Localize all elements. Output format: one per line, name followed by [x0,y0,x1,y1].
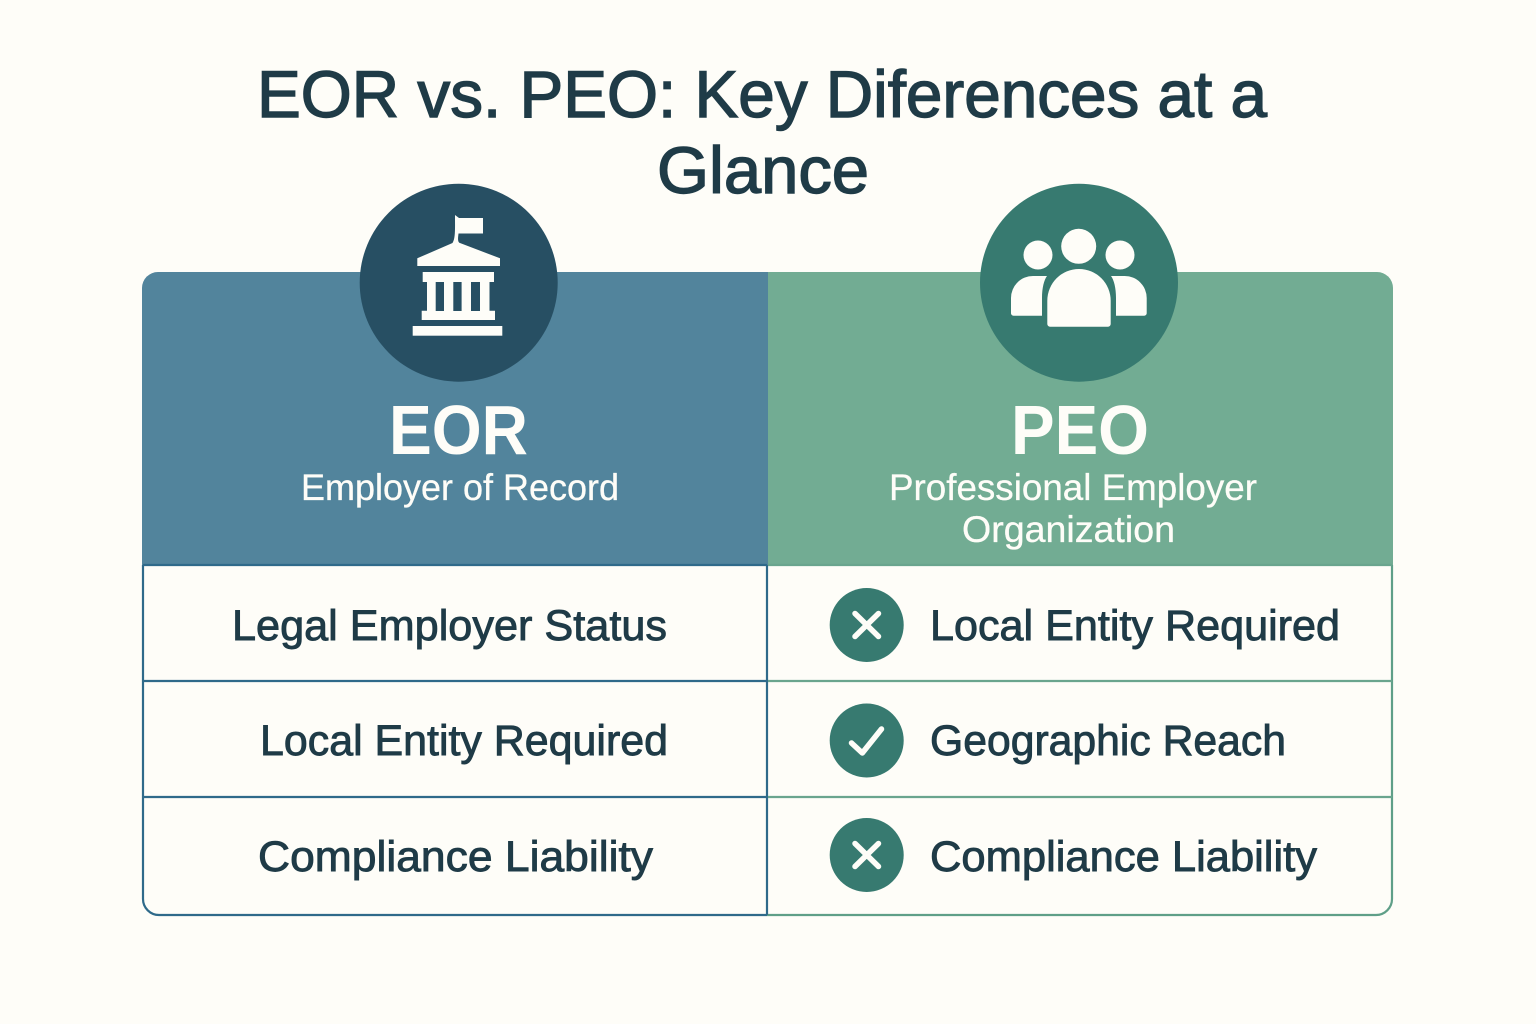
EOR header background [142,272,768,565]
PEO row: geographic reach, check: Geographic Reach [930,717,1286,765]
PEO row: local entity required, cross [830,588,1340,662]
panel: PEO column [768,184,1393,892]
panel: EOR column [142,184,768,881]
PEO row: compliance liability, cross: Compliance Liability [930,833,1318,881]
PEO row: compliance liability, cross [830,818,1318,892]
PEO subtitle [889,467,1257,550]
PEO icon: group of people [980,184,1178,382]
EOR row: compliance liability: Compliance Liability [258,833,654,881]
PEO heading: PEO [1011,391,1149,469]
PEO header background [768,272,1393,565]
EOR icon: government building with flag [360,184,558,382]
EOR row: legal employer status: Legal Employer Status [232,602,667,650]
title: EOR vs. PEO: Key Diferences at a [257,57,1267,131]
title: Glance [657,133,869,207]
EOR subtitle: Employer of Record [301,467,619,508]
comparison table lines [143,565,1392,915]
EOR row: local entity required: Local Entity Required [260,717,668,765]
title [257,57,1267,207]
PEO subtitle: Professional Employer [889,467,1257,508]
EOR heading: EOR [389,391,528,469]
PEO subtitle: Organization [962,509,1175,550]
PEO row: geographic reach, check [830,704,1286,778]
PEO row: local entity required, cross: Local Entity Required [930,602,1340,650]
